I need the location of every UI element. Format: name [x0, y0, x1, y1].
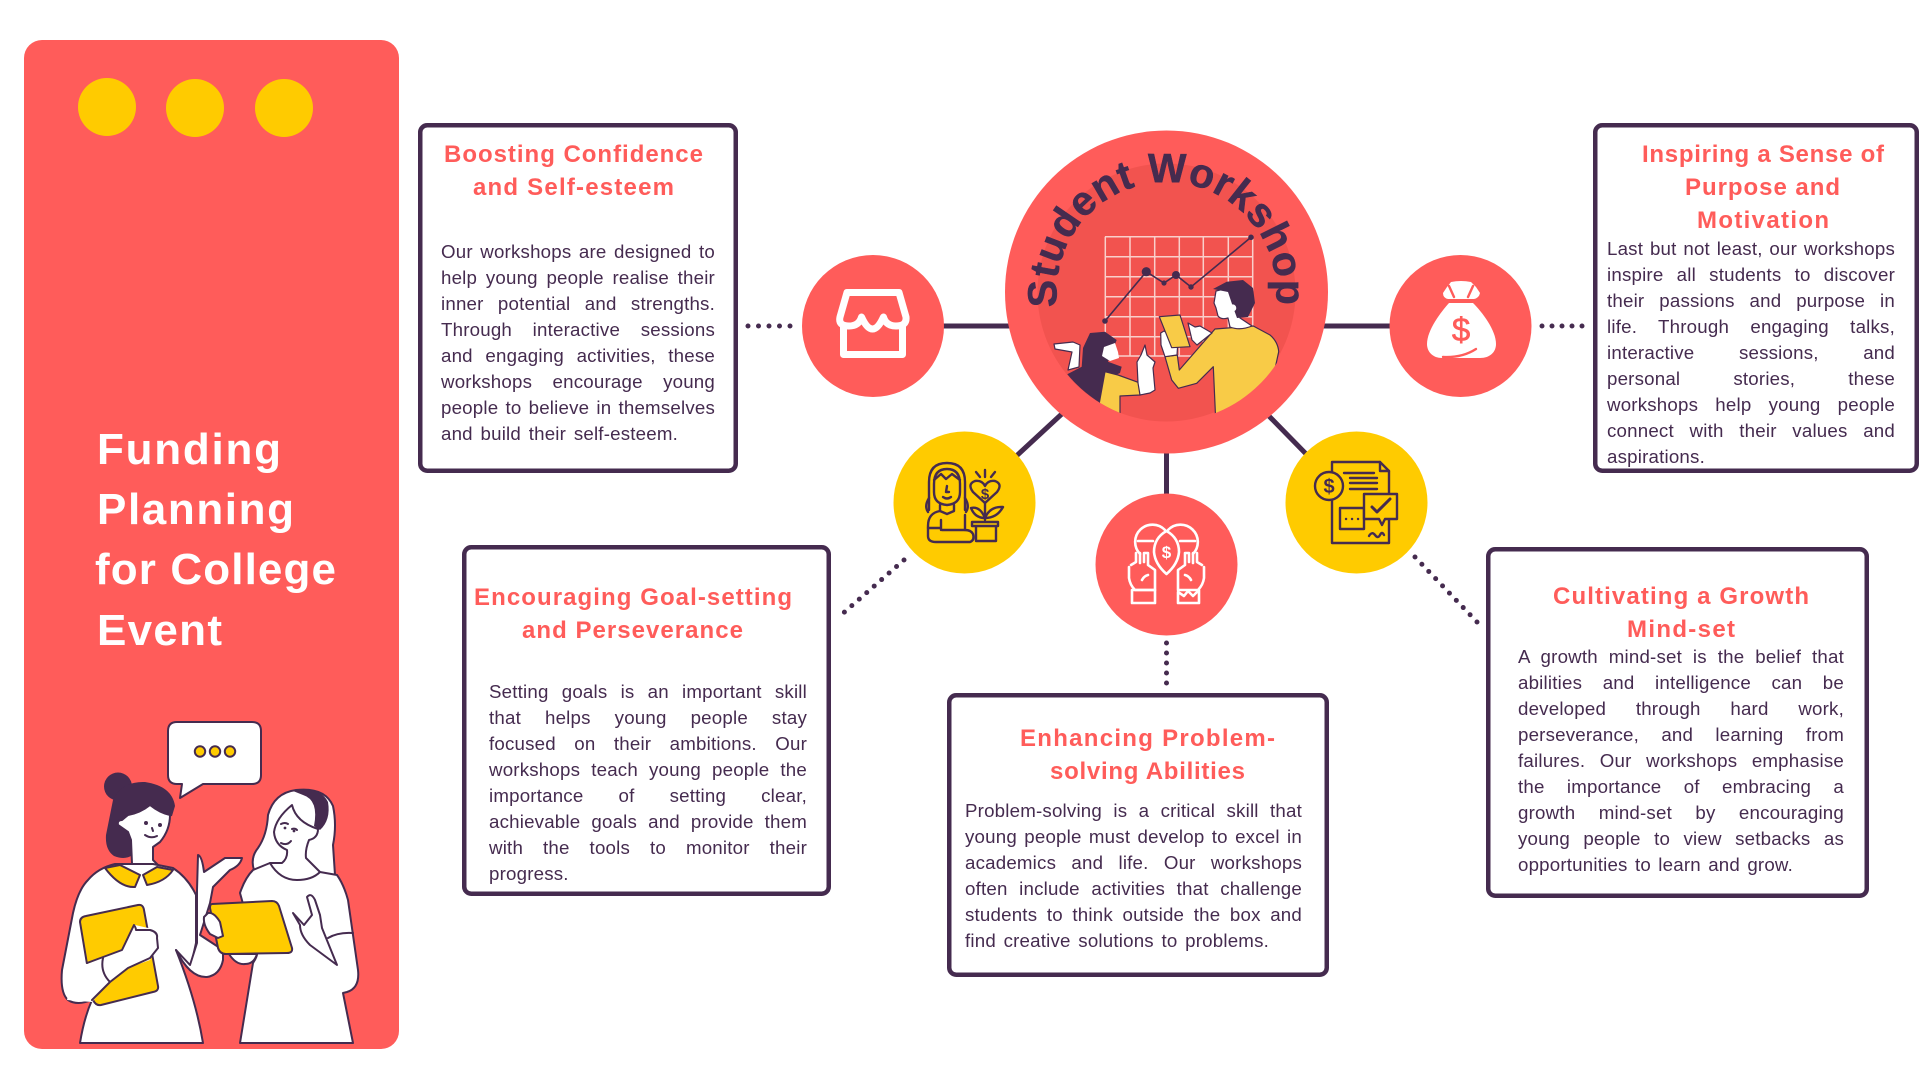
title: Event	[97, 606, 222, 655]
body text: find creative solutions to problems.	[965, 930, 1269, 950]
body text: their passions and purpose in	[1607, 290, 1895, 310]
body text: young people to view setbacks as	[1518, 828, 1844, 848]
body text: Setting goals is an important skill	[489, 680, 807, 702]
woman on left	[62, 772, 292, 1043]
body text: workshops teach young people the	[489, 758, 807, 780]
body text: personal stories, these	[1607, 368, 1895, 388]
body text: academics and life. Our workshops	[965, 852, 1302, 872]
card: Enhancing Problem-solving	[949, 695, 1327, 975]
body text: often include activities that challenge	[965, 878, 1302, 898]
body text: and engaging activities, these	[441, 344, 715, 366]
icon: woman with money plant	[894, 432, 1036, 574]
heading	[444, 141, 703, 201]
body text: opportunities to learn and grow.	[1518, 854, 1793, 874]
heading	[1642, 141, 1885, 234]
heading: Cultivating a Growth	[1553, 583, 1809, 610]
body text: aspirations.	[1607, 446, 1705, 466]
people at the chart	[1054, 280, 1279, 420]
body text: with the tools to monitor their	[489, 836, 807, 858]
title	[95, 425, 336, 655]
body text: achievable goals and provide them	[489, 810, 807, 832]
connector lines	[940, 326, 1395, 498]
title: Planning	[97, 485, 294, 534]
heading: Encouraging Goal-setting	[474, 584, 792, 611]
speech bubble	[168, 722, 261, 798]
body text: Through interactive sessions	[441, 318, 715, 340]
body text	[441, 238, 721, 450]
body text: importance of setting clear,	[489, 784, 807, 806]
body text: focused on their ambitions. Our	[489, 732, 807, 754]
body text: and build their self-esteem.	[441, 422, 678, 444]
heading: Enhancing Problem-	[1020, 725, 1275, 752]
body text: Last but not least, our workshops	[1607, 238, 1895, 258]
body text: workshops encourage young	[441, 370, 715, 392]
title: for College	[95, 545, 336, 594]
heading: Motivation	[1697, 207, 1829, 234]
body text: Problem-solving is a critical skill that	[965, 800, 1302, 820]
body text: perseverance, and learning from	[1518, 724, 1844, 744]
dotted connectors	[748, 326, 1583, 684]
heading	[474, 584, 792, 644]
card: Inspiring a Sense of Purpose	[1595, 125, 1917, 474]
body text: life. Through engaging talks,	[1607, 316, 1895, 336]
icon: money bag	[1390, 255, 1532, 397]
icon: documents and approval: $	[1323, 476, 1335, 498]
card: Encouraging Goal-setting	[464, 547, 829, 894]
heading: and Perseverance	[522, 617, 743, 644]
body text: developed through hard work,	[1518, 698, 1844, 718]
icon: woman with money plant: $	[981, 486, 990, 503]
man	[1159, 280, 1279, 420]
icon: hands with heart balloons	[1096, 494, 1238, 636]
body text: A growth mind-set is the belief that	[1518, 646, 1844, 666]
illustration: two women talking	[62, 722, 358, 1043]
body text: young people must develop to excel in	[965, 826, 1302, 846]
heading: Purpose and	[1685, 174, 1840, 201]
body text: people to believe in themselves	[441, 396, 715, 418]
body text: inspire all students to discover	[1607, 264, 1895, 284]
tablet left	[80, 905, 158, 1005]
heading: and Self-esteem	[473, 174, 674, 201]
body text: help young people realise their	[441, 266, 715, 288]
heading	[1553, 583, 1809, 643]
icon: storefront	[802, 255, 944, 397]
body text	[1518, 644, 1850, 882]
body text: workshops help young people	[1607, 394, 1895, 414]
body text: Our workshops are designed to	[441, 240, 715, 262]
title: Funding	[97, 425, 281, 474]
heading	[1020, 725, 1275, 785]
woman on right	[240, 790, 358, 1043]
heading: Mind-set	[1627, 616, 1735, 643]
body text: that helps young people stay	[489, 706, 807, 728]
central hub: Student Workshop	[1005, 130, 1328, 454]
card: Boosting Confidence	[420, 125, 736, 471]
line chart	[1102, 234, 1254, 324]
body text: failures. Our workshops emphasise	[1518, 750, 1844, 770]
body text: students to think outside the box and	[965, 904, 1302, 924]
curved title: Student Workshop	[1028, 154, 1299, 306]
body text: growth mind-set by encouraging	[1518, 802, 1844, 822]
icon: documents and approval	[1286, 432, 1428, 574]
body text: progress.	[489, 862, 569, 884]
icon: hands with heart balloons: $	[1162, 543, 1172, 562]
body text	[1607, 236, 1901, 474]
body text: connect with their values and	[1607, 420, 1895, 440]
heading: Inspiring a Sense of	[1642, 141, 1885, 168]
card: Cultivating a Growth Mind-set	[1488, 549, 1867, 896]
body text	[489, 678, 813, 890]
heading: solving Abilities	[1050, 758, 1245, 785]
tablet right	[210, 901, 292, 954]
body text: the importance of embracing a	[1518, 776, 1844, 796]
panel: left sidebar	[24, 40, 399, 1049]
body text	[965, 798, 1308, 958]
body text: abilities and intelligence can be	[1518, 672, 1844, 692]
heading: Boosting Confidence	[444, 141, 703, 168]
icon: money bag: $	[1452, 311, 1470, 348]
chart grid	[1105, 237, 1253, 356]
decorative yellow dots	[78, 78, 313, 137]
body text: inner potential and strengths.	[441, 292, 715, 314]
body text: interactive sessions, and	[1607, 342, 1895, 362]
woman	[1054, 332, 1155, 420]
